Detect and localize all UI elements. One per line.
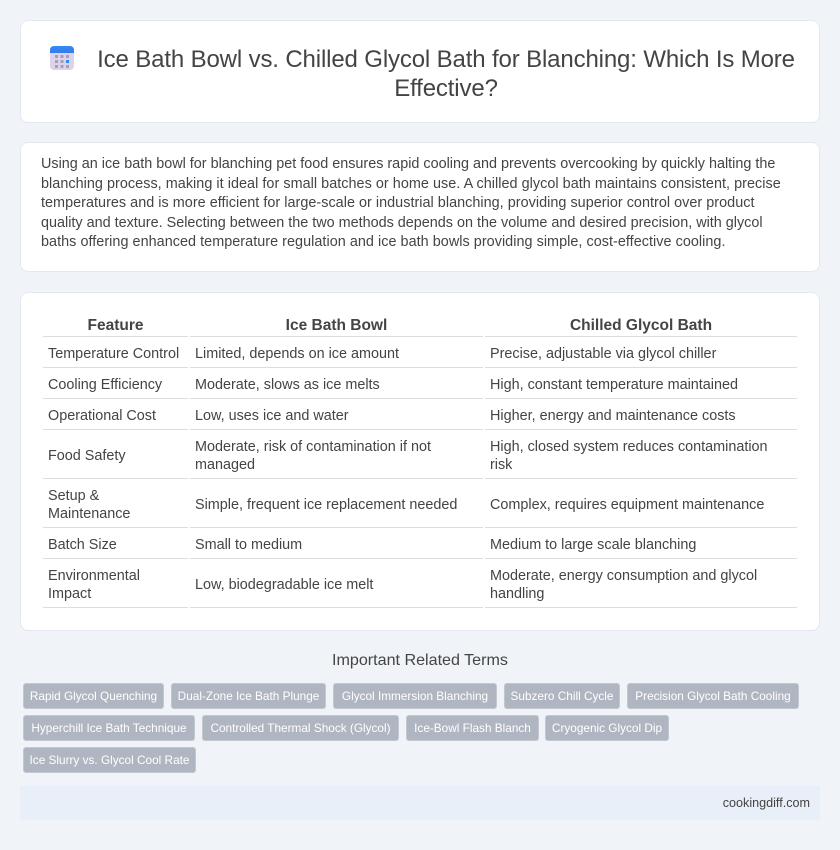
comparison table panel [20, 292, 820, 631]
row: operational cost: Higher, energy and maintenance costs [490, 408, 736, 424]
table header: Chilled Glycol Bath [570, 317, 712, 334]
tag [171, 683, 326, 709]
tag [406, 715, 539, 741]
tag [23, 747, 196, 773]
title: Effective? [394, 75, 498, 102]
tag [23, 715, 195, 741]
description text: Using an ice bath bowl for blanching pet food ensures rapid cooling and prevents overcooking by quickly halting the [41, 156, 775, 172]
tag [504, 683, 620, 709]
row: cooling efficiency: High, constant temperature maintained [490, 377, 738, 393]
row: temperature control: Limited, depends on ice amount [195, 346, 399, 362]
tag [333, 683, 497, 709]
row: environmental impact: Impact [48, 586, 91, 602]
row: batch size [48, 537, 696, 553]
title [97, 46, 795, 102]
tag [23, 683, 164, 709]
row: operational cost: Low, uses ice and water [195, 408, 349, 424]
tag: Subzero Chill Cycle [511, 689, 613, 703]
tag [627, 683, 799, 709]
footer source text: cookingdiff.com [723, 796, 810, 810]
row: cooling efficiency: Cooling Efficiency [48, 377, 162, 393]
row: food safety: risk [490, 457, 512, 473]
table header: Feature [88, 317, 144, 334]
tag: Ice-Bowl Flash Blanch [414, 721, 531, 735]
row: setup and maintenance: Maintenance [48, 506, 130, 522]
row: setup and maintenance: Complex, requires equipment maintenance [490, 497, 764, 513]
row: setup and maintenance: Simple, frequent ice replacement needed [195, 497, 457, 513]
tag: Rapid Glycol Quenching [30, 689, 157, 703]
row: environmental impact [48, 568, 757, 602]
description panel [20, 142, 820, 272]
tag: Cryogenic Glycol Dip [552, 721, 662, 735]
title: Ice Bath Bowl vs. Chilled Glycol Bath for Blanching: Which Is More [97, 46, 795, 73]
related terms heading: Important Related Terms [332, 651, 508, 669]
row: cooling efficiency: Moderate, slows as ice melts [195, 377, 380, 393]
tag: Precision Glycol Bath Cooling [635, 689, 791, 703]
header panel [20, 20, 820, 123]
description text: blanching process, making it ideal for small batches or home use. A chilled glycol bath maintains consistent, precise [41, 176, 781, 192]
tag: Glycol Immersion Blanching [342, 689, 488, 703]
tag: Hyperchill Ice Bath Technique [31, 721, 187, 735]
row: environmental impact: Low, biodegradable ice melt [195, 577, 373, 593]
row: batch size: Medium to large scale blanching [490, 537, 696, 553]
footer [20, 786, 820, 820]
row: batch size: Batch Size [48, 537, 117, 553]
row: cooling efficiency [48, 377, 738, 393]
icon: calendar [50, 46, 74, 70]
row: environmental impact: Environmental [48, 568, 140, 584]
row: setup and maintenance [48, 488, 764, 522]
row: batch size: Small to medium [195, 537, 302, 553]
row: food safety: managed [195, 457, 255, 473]
row: food safety [48, 439, 768, 473]
table header [88, 317, 712, 334]
description text: quality and texture. Selecting between the two methods depends on the volume and desired precision, with glycol [41, 214, 763, 230]
tag: Controlled Thermal Shock (Glycol) [210, 721, 391, 735]
row: environmental impact: handling [490, 586, 544, 602]
table header: Ice Bath Bowl [286, 317, 387, 334]
tag [202, 715, 399, 741]
row: temperature control [48, 346, 716, 362]
row: food safety: Moderate, risk of contamination if not [195, 439, 431, 455]
related terms tags [23, 683, 799, 773]
description text: temperatures and is more efficient for large-scale or industrial blanching, providing superior control over product [41, 195, 754, 211]
row: operational cost [48, 408, 736, 424]
row: temperature control: Temperature Control [48, 346, 179, 362]
row: setup and maintenance: Setup & [48, 488, 99, 504]
row: food safety: Food Safety [48, 448, 126, 464]
row: environmental impact: Moderate, energy consumption and glycol [490, 568, 757, 584]
tag [545, 715, 669, 741]
tag: Ice Slurry vs. Glycol Cool Rate [30, 753, 189, 767]
row: food safety: High, closed system reduces contamination [490, 439, 768, 455]
description text [41, 156, 781, 250]
row: operational cost: Operational Cost [48, 408, 156, 424]
tag: Dual-Zone Ice Bath Plunge [178, 689, 319, 703]
row: temperature control: Precise, adjustable via glycol chiller [490, 346, 716, 362]
description text: baths offering enhanced temperature regulation and ice bath bowls providing simple, cost-effective cooling. [41, 234, 726, 250]
